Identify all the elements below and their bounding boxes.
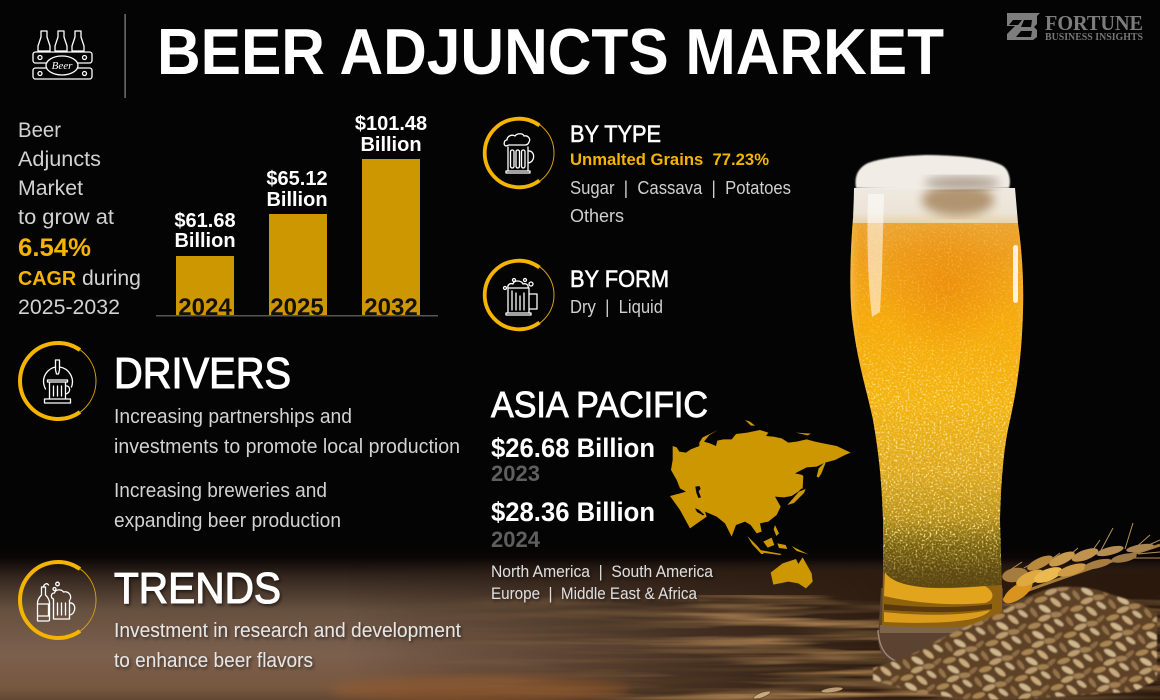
glass base bbox=[878, 588, 1003, 664]
bar 2025: 2025 bbox=[270, 294, 324, 321]
image: beer glass bbox=[845, 155, 1030, 664]
by type text: Sugar | Cassava | Potatoes bbox=[570, 178, 791, 198]
by type text: Others bbox=[570, 206, 624, 226]
by form text: Dry | Liquid bbox=[570, 297, 663, 317]
bar 2025: $65.12 bbox=[266, 168, 328, 190]
bar chart: market size bbox=[156, 113, 438, 321]
icon ring: by form bbox=[484, 260, 554, 330]
beer body bbox=[845, 218, 1030, 590]
trends text: Investment in research and development bbox=[114, 620, 461, 642]
header divider bbox=[124, 14, 126, 98]
bar 2032: Billion bbox=[360, 134, 422, 156]
title: BEER ADJUNCTS MARKET bbox=[157, 15, 944, 88]
bar 2032 bbox=[355, 113, 427, 321]
CAGR text block: to grow at bbox=[18, 205, 114, 229]
by form text bbox=[570, 266, 669, 317]
drivers text: Increasing breweries and bbox=[114, 480, 327, 502]
region: Asia Pacific stats: 2024 bbox=[491, 527, 541, 552]
bar 2025 bbox=[266, 168, 328, 321]
icon ring: drivers bbox=[19, 342, 96, 420]
logo: Fortune Business Insights bbox=[1007, 11, 1143, 43]
CAGR text block bbox=[18, 118, 141, 319]
bar 2024: 2024 bbox=[178, 294, 232, 321]
by type text bbox=[570, 121, 791, 226]
map: Asia Pacific bbox=[670, 420, 851, 588]
bar 2025: Billion bbox=[266, 189, 328, 211]
CAGR text block: 2025-2032 bbox=[18, 295, 120, 319]
by type text: Unmalted Grains 77.23% bbox=[570, 150, 769, 169]
icon ring: by type bbox=[484, 118, 554, 188]
bar 2032: $101.48 bbox=[355, 113, 427, 135]
background bbox=[0, 558, 1160, 700]
icon: beer crate bbox=[33, 31, 92, 79]
drivers heading: DRIVERS bbox=[114, 349, 291, 398]
bar 2024: $61.68 bbox=[174, 210, 236, 232]
image: wheat ear bbox=[1000, 523, 1160, 607]
CAGR text block: Beer bbox=[18, 118, 61, 142]
icon ring: trends bbox=[19, 562, 96, 638]
drivers text: expanding beer production bbox=[114, 510, 341, 532]
bar 2024: Billion bbox=[174, 230, 236, 252]
trends text: to enhance beer flavors bbox=[114, 650, 313, 672]
trends heading: TRENDS bbox=[114, 564, 281, 613]
by form text: BY FORM bbox=[570, 266, 669, 293]
CAGR text block: 6.54% bbox=[18, 234, 91, 262]
icon: beer crate: Beer bbox=[52, 60, 73, 72]
logo: Fortune Business Insights: FORTUNE bbox=[1045, 11, 1143, 35]
by type text: BY TYPE bbox=[570, 121, 661, 148]
region: Asia Pacific stats: Europe | Middle East & Africa bbox=[491, 585, 698, 603]
drivers text bbox=[114, 406, 460, 532]
CAGR text block: CAGR during bbox=[18, 266, 141, 290]
trends text bbox=[114, 620, 461, 672]
bar 2032: 2032 bbox=[364, 294, 418, 321]
region: Asia Pacific stats bbox=[491, 384, 714, 603]
foam bbox=[853, 188, 1018, 223]
bar 2024 bbox=[174, 210, 236, 321]
drivers text: Increasing partnerships and bbox=[114, 406, 352, 428]
logo: Fortune Business Insights: BUSINESS INSIGHTS bbox=[1045, 32, 1143, 43]
region: Asia Pacific stats: ASIA PACIFIC bbox=[491, 384, 708, 425]
CAGR text block: Market bbox=[18, 176, 83, 200]
region: Asia Pacific stats: $28.36 Billion bbox=[491, 497, 655, 527]
image: barley grain pile bbox=[753, 587, 1157, 700]
CAGR text block: Adjuncts bbox=[18, 147, 101, 171]
beer swirl at base bbox=[882, 570, 1002, 627]
region: Asia Pacific stats: $26.68 Billion bbox=[491, 433, 655, 463]
drivers text: investments to promote local production bbox=[114, 436, 460, 458]
region: Asia Pacific stats: 2023 bbox=[491, 461, 540, 486]
glass highlights bbox=[867, 194, 884, 317]
region: Asia Pacific stats: North America | South America bbox=[491, 563, 714, 581]
